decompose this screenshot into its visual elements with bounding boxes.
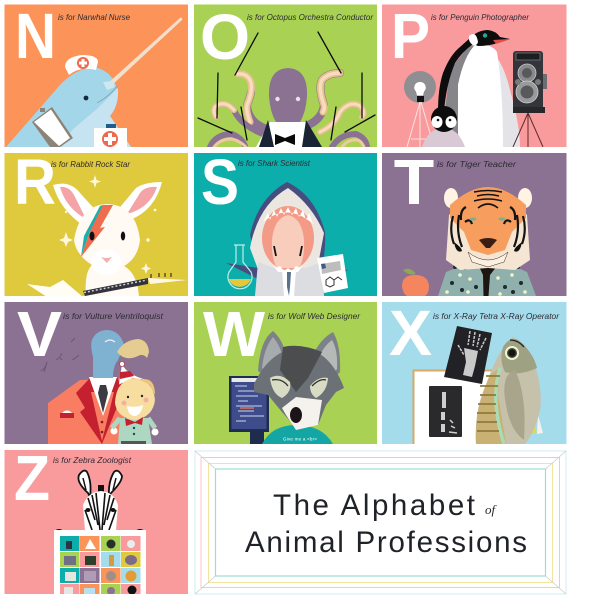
letter Z: Z xyxy=(14,442,50,514)
panel: N narwhal nurse xyxy=(4,0,188,147)
letter O: O xyxy=(200,1,250,73)
sparkles xyxy=(59,175,156,274)
title: Animal Professions xyxy=(245,526,527,559)
letter S: S xyxy=(201,146,239,218)
tetra fish xyxy=(476,337,543,444)
caption T: is for Tiger Teacher xyxy=(437,160,516,169)
caption S: is for Shark Scientist xyxy=(238,159,311,168)
letter N: N xyxy=(15,0,56,72)
x-ray foot xyxy=(429,386,462,437)
conductor batons xyxy=(198,32,375,140)
caption P: is for Penguin Photographer xyxy=(431,13,529,22)
panel: V vulture ventriloquist xyxy=(4,298,188,444)
wolf: Give me a <br> xyxy=(283,436,317,442)
small birds xyxy=(41,338,79,372)
vulture xyxy=(48,330,149,444)
caption N: is for Narwhal Nurse xyxy=(58,13,131,22)
panel: R rabbit rock star xyxy=(4,146,188,296)
panel: P penguin photographer xyxy=(382,0,566,147)
caption O: is for Octopus Orchestra Conductor xyxy=(247,13,373,22)
light box frame xyxy=(414,370,494,446)
apple xyxy=(402,269,429,297)
puppet xyxy=(110,362,158,444)
panel: W wolf web designer xyxy=(194,298,377,444)
letter T xyxy=(394,160,434,204)
title xyxy=(245,489,527,559)
guitar xyxy=(27,273,187,297)
paper with molecule xyxy=(317,254,348,293)
penguin xyxy=(438,30,520,147)
caption X: is for X-Ray Tetra X-Ray Operator xyxy=(433,312,559,321)
shark xyxy=(226,182,348,296)
title: The Alphabet xyxy=(273,489,475,522)
x-ray hand xyxy=(444,326,492,384)
camera xyxy=(513,51,547,147)
letter X: X xyxy=(389,297,432,369)
narwhal xyxy=(6,17,182,147)
flask xyxy=(228,245,252,289)
letter R: R xyxy=(14,146,56,218)
caption Z: is for Zebra Zoologist xyxy=(53,456,132,465)
first aid kit xyxy=(94,124,127,148)
rabbit xyxy=(53,182,162,298)
panel: T tiger teacher xyxy=(382,153,566,296)
clipboard xyxy=(32,107,73,147)
caption W: is for Wolf Web Designer xyxy=(268,312,360,321)
caption R: is for Rabbit Rock Star xyxy=(51,160,130,169)
alphabet poster xyxy=(54,530,146,596)
octopus xyxy=(210,68,367,147)
panel: Z zebra zoologist xyxy=(4,442,188,594)
panel: X x-ray tetra operator xyxy=(382,297,566,444)
photo lamp xyxy=(404,71,436,147)
panel: S shark scientist xyxy=(194,146,377,296)
wolf xyxy=(254,331,344,444)
penguin chick xyxy=(422,106,465,147)
tiger xyxy=(438,187,536,296)
letter P: P xyxy=(391,0,430,72)
title: of xyxy=(485,502,498,517)
monitor xyxy=(229,376,269,444)
caption V: is for Vulture Ventriloquist xyxy=(63,312,164,321)
title frame xyxy=(195,451,566,594)
zebra xyxy=(54,471,144,535)
letter V: V xyxy=(17,298,62,370)
letter W: W xyxy=(203,298,266,370)
panel: O octopus conductor xyxy=(194,1,377,147)
